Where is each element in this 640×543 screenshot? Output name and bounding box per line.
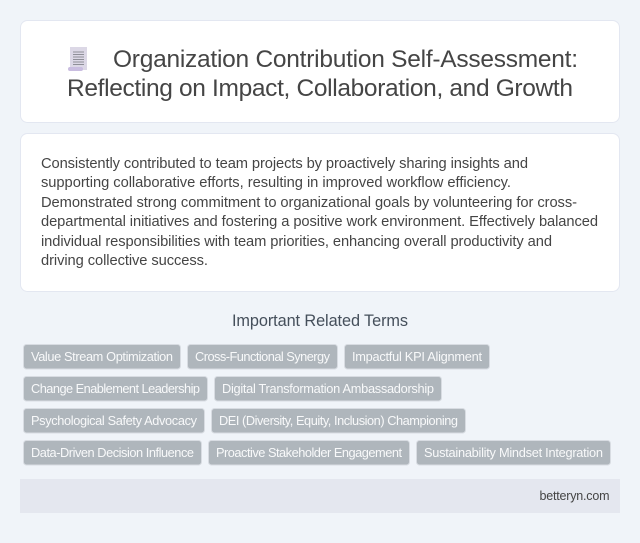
tag: [24, 440, 202, 465]
panel: header: [20, 20, 620, 122]
tag: Sustainability Mindset Integration: [424, 445, 603, 460]
panel: summary text: [20, 134, 620, 292]
tag: Cross-Functional Synergy: [195, 349, 331, 364]
tag: [344, 344, 490, 369]
tag: Proactive Stakeholder Engagement: [216, 445, 402, 460]
tag: Psychological Safety Advocacy: [31, 413, 198, 428]
tag group: related terms: [24, 344, 610, 465]
summary paragraph: [41, 156, 598, 269]
tag: Impactful KPI Alignment: [352, 349, 482, 364]
title: Organization Contribution Self-Assessment:: [113, 46, 578, 73]
tag: [214, 376, 442, 401]
footer source label: betteryn.com: [540, 489, 610, 503]
summary paragraph: Consistently contributed to team projects by proactively sharing insights and: [41, 156, 528, 172]
tag: Value Stream Optimization: [31, 349, 173, 364]
tag: Digital Transformation Ambassadorship: [222, 381, 434, 396]
footer: [20, 479, 620, 513]
summary paragraph: supporting collaborative efforts, resulting in improved workflow efficiency.: [41, 175, 511, 191]
tag: [212, 408, 466, 433]
tag: [208, 440, 410, 465]
title: Reflecting on Impact, Collaboration, and Growth: [67, 75, 573, 102]
tag: Data-Driven Decision Influence: [31, 445, 194, 460]
tag: DEI (Diversity, Equity, Inclusion) Championing: [219, 413, 458, 428]
tag: [24, 376, 208, 401]
summary paragraph: individual responsibilities with team priorities, enhancing overall productivity and: [41, 234, 552, 250]
tag: [24, 408, 204, 433]
summary paragraph: driving collective success.: [41, 253, 208, 269]
tag: Change Enablement Leadership: [31, 381, 200, 396]
icon: document scroll: [68, 47, 87, 71]
heading: related terms: Important Related Terms: [232, 312, 408, 330]
tag: [188, 344, 338, 369]
tag: [24, 344, 180, 369]
summary paragraph: Demonstrated strong commitment to organizational goals by volunteering for cross-: [41, 195, 577, 211]
tag: [416, 440, 610, 465]
title: [67, 46, 578, 102]
summary paragraph: departmental initiatives and fostering a positive work environment. Effectively balanced: [41, 214, 598, 230]
